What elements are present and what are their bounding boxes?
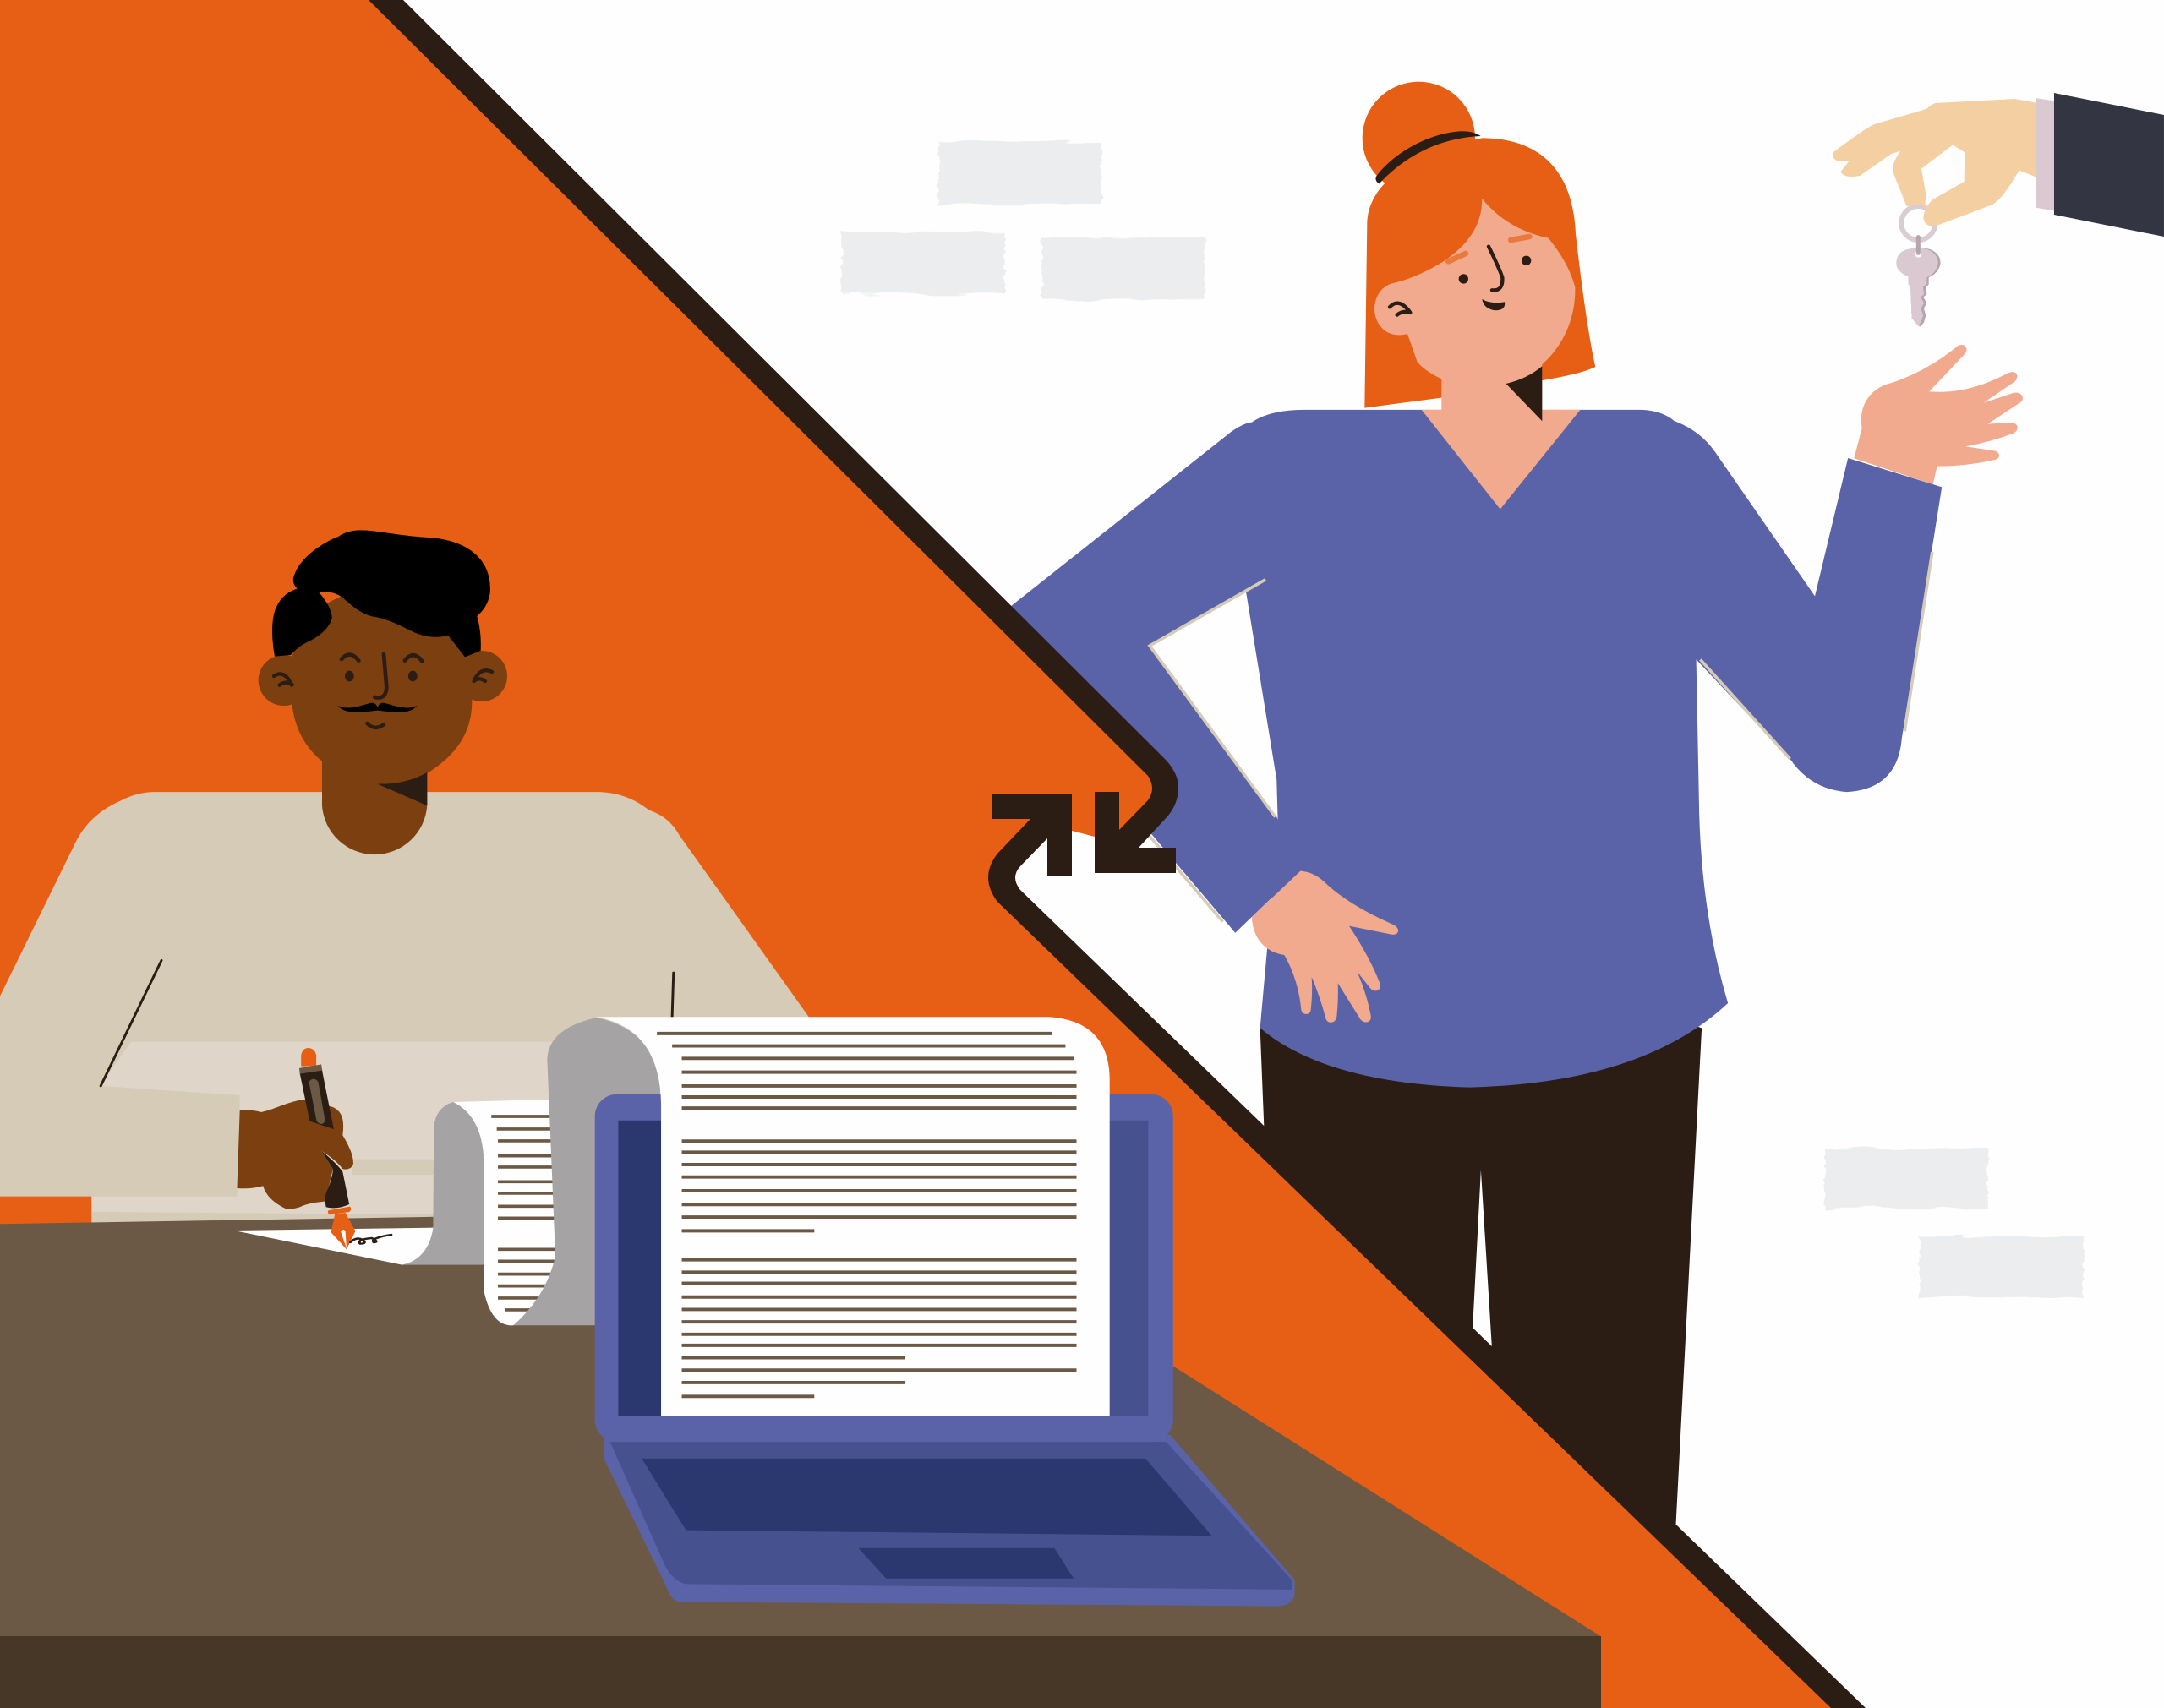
laptop base <box>604 1435 1294 1606</box>
hair bun <box>1363 82 1475 194</box>
hair <box>1364 138 1595 408</box>
exchange arrow: lower diagonal <box>988 794 1866 1708</box>
shirt folds and arm <box>0 1042 589 1225</box>
pen <box>299 1048 334 1129</box>
man's hand <box>237 1100 353 1209</box>
signature squiggle <box>351 1235 391 1244</box>
orange gap under arm <box>0 1197 91 1225</box>
gap between legs <box>1473 1170 1492 1348</box>
hand handing over the key <box>1833 93 2164 327</box>
neckline <box>1422 410 1580 509</box>
contract text lines <box>657 1034 1077 1396</box>
left sleeve <box>966 432 1300 933</box>
giver's hand <box>1833 100 2036 226</box>
desk top <box>0 1214 1601 1636</box>
face <box>1374 199 1575 384</box>
key <box>1896 237 1941 327</box>
scroll text lines <box>491 1116 562 1310</box>
scroll upper fold <box>513 1018 660 1325</box>
facial features <box>1390 237 1531 315</box>
man's head <box>259 530 507 854</box>
grey brick smudges <box>842 142 2083 1297</box>
trousers <box>1260 966 1702 1531</box>
paper fold <box>402 1102 484 1265</box>
man's shirt <box>0 792 855 1241</box>
man <box>0 530 1601 1708</box>
face and neck <box>292 589 472 854</box>
lighter shirt panel <box>91 1042 589 1224</box>
neck shadow <box>378 772 427 805</box>
trackpad <box>859 1548 1074 1579</box>
neck shadow <box>1506 366 1542 421</box>
keyboard <box>642 1459 1212 1536</box>
sleeve crease lines <box>101 960 674 1086</box>
laptop lid <box>595 1094 1173 1442</box>
jumper torso <box>1231 410 1815 1088</box>
neck <box>1441 363 1542 410</box>
desk front <box>0 1636 1601 1708</box>
hand, pen and scroll <box>234 1018 660 1325</box>
laptop deck <box>610 1442 1292 1590</box>
right sleeve <box>1691 458 1942 792</box>
hair band <box>1375 131 1481 183</box>
ears <box>259 655 309 706</box>
shirt cuff <box>2036 98 2054 210</box>
paper on desk <box>234 1228 434 1265</box>
suit sleeve <box>2054 93 2164 237</box>
woman's head <box>1363 82 1595 421</box>
laptop and contract <box>595 1017 1294 1606</box>
exchange arrow: upper diagonal <box>369 0 1178 873</box>
woman's hand on hip <box>1252 871 1398 1023</box>
key ring <box>1901 206 1935 240</box>
pen nib section <box>321 1151 356 1249</box>
screen <box>618 1121 701 1416</box>
contract sheet <box>596 1017 1110 1416</box>
woman's raised hand <box>1854 345 2023 484</box>
sleeve edge highlights <box>1150 552 1932 922</box>
facial features <box>274 654 492 728</box>
man's forearm <box>0 1079 240 1197</box>
woman <box>966 410 1942 1531</box>
hair <box>272 530 490 657</box>
paper middle section <box>453 1099 566 1325</box>
